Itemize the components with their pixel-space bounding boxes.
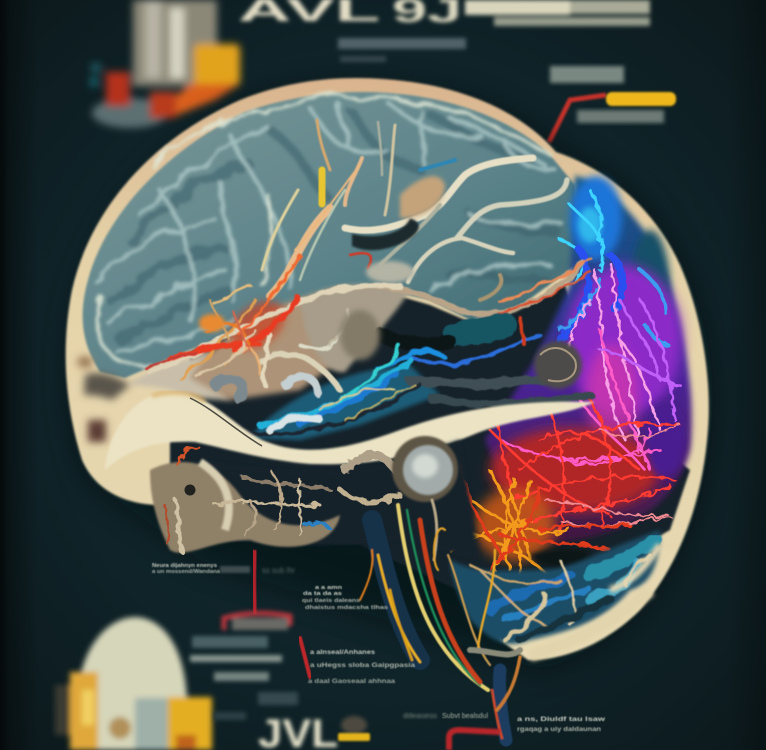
title (out of focus)	[238, 0, 650, 30]
teal fringe	[630, 230, 670, 350]
orange glow	[475, 489, 555, 561]
mid-brain dark panel	[170, 285, 690, 600]
grey node	[366, 261, 414, 283]
bottom labels: rgaqag a uiy daldaunan	[517, 727, 601, 733]
annotation: mid label: dhaistus mdacsha tlhas	[305, 605, 388, 611]
beige fold mass	[300, 284, 410, 372]
annotation: lower mid label: a uHegss sloba Gaipgpasia	[310, 662, 415, 669]
JVL logo	[258, 712, 370, 750]
red connector: brainstem	[254, 550, 256, 614]
bottom labels: a ns, Diuldf tau lsaw	[517, 716, 606, 723]
annotation: brainstem label: Neura dijahnyn enenys	[152, 563, 217, 569]
brain illustration	[66, 78, 709, 740]
top-right callout	[549, 66, 676, 142]
logo dome	[341, 716, 367, 734]
cortical vessels	[262, 120, 567, 300]
neon fibres	[450, 190, 680, 600]
cyan glow	[578, 207, 602, 243]
bottom-left blurred diagram	[55, 617, 212, 750]
annotation: mid label: a a amn	[315, 585, 343, 591]
bottom labels: ddeasess	[403, 713, 438, 720]
annotation: mid label: da ta da as	[303, 591, 342, 597]
red core	[222, 291, 294, 359]
annotation: brainstem label: ss sub ihr	[262, 566, 295, 575]
descending cable bundle	[360, 500, 520, 740]
blue glow	[570, 176, 622, 260]
right panel base	[485, 175, 692, 545]
dark slot in cortex	[352, 218, 419, 250]
brain outer shell	[66, 78, 709, 660]
annotation: lower mid label: a daal Gaoseaal ahhnaa	[308, 678, 395, 685]
brain shadow	[70, 86, 713, 670]
dark nerve cavity	[530, 548, 590, 570]
brainstem tangle	[150, 447, 400, 553]
bottom labels: Subvt bealsdul	[442, 711, 488, 720]
bottom cream rim	[530, 590, 650, 655]
orange bulb	[199, 314, 225, 332]
bottom labels	[403, 711, 606, 733]
subtitle (out of focus)	[338, 38, 466, 62]
annotation: lower mid label: a alnseal/Anhanes	[310, 649, 375, 656]
rim smudges	[77, 356, 130, 442]
annotation: mid label: qui tlaeis daleans	[302, 598, 360, 604]
teal-blue cavity	[250, 365, 440, 440]
logo yellow bar	[338, 733, 370, 741]
lower-right blue and cream lobe	[450, 530, 660, 655]
annotation: lower mid label	[308, 649, 415, 685]
annotation: mid label	[302, 585, 388, 611]
annotation: brainstem label: a un mossend/Wandana	[152, 569, 221, 575]
grey tangle ball	[534, 341, 582, 389]
rounded gland	[392, 436, 458, 502]
warm base blob	[190, 298, 345, 400]
red tick	[300, 638, 310, 677]
purple glow	[566, 265, 682, 415]
blurred callout box	[190, 613, 298, 720]
pale fold above tongue	[130, 350, 230, 400]
mid-brain folds and wires	[145, 255, 590, 434]
brainstem eye	[184, 484, 196, 496]
red glow	[490, 428, 660, 512]
red connector: elbow	[449, 730, 500, 750]
dark fold slots	[340, 310, 380, 360]
right panel: neon nerve bundle	[475, 175, 692, 561]
cortex panel	[83, 92, 580, 378]
annotation: brainstem label	[152, 563, 295, 575]
lower dark cavity	[200, 440, 480, 560]
temporal fold and cream tongue	[105, 392, 595, 470]
magenta glow	[586, 345, 638, 445]
beige nodule	[400, 176, 445, 218]
cortex folds	[95, 95, 560, 366]
purple lower right	[645, 402, 685, 478]
red connector: vertical	[402, 677, 412, 750]
top-left blurred anatomical model	[89, 0, 240, 128]
